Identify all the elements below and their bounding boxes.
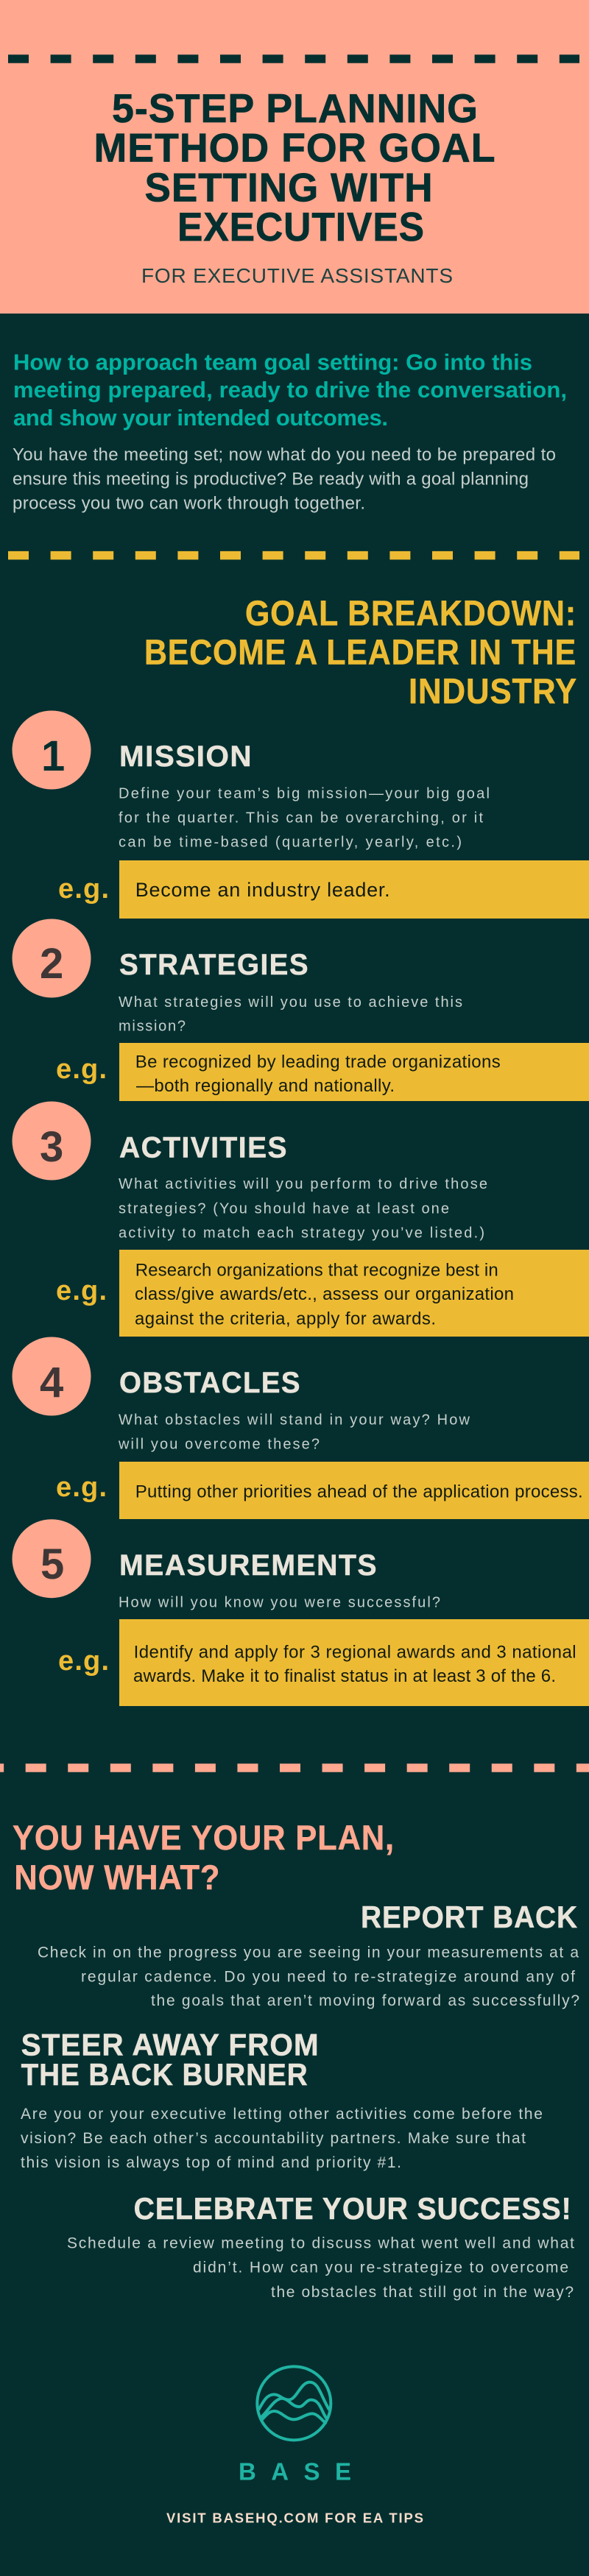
panel: step 3 activities — [12, 1101, 589, 1337]
section text: vision? Be each other’s accountability partners. Make sure that — [21, 2130, 526, 2147]
icon: number 2: 2 — [40, 940, 63, 988]
title — [94, 85, 496, 250]
icon: mountains in circle — [257, 2366, 331, 2440]
logo: base — [239, 2366, 351, 2485]
section text: Check in on the progress you are seeing in your measurements at a — [38, 1944, 579, 1961]
section text: the goals that aren’t moving forward as successfully? — [151, 1992, 579, 2009]
example box — [119, 1619, 589, 1706]
icon: number 5: 5 — [40, 1540, 64, 1588]
heading: you have your plan — [13, 1818, 395, 1897]
section: celebrate your success — [67, 2191, 574, 2301]
example box: against the criteria, apply for awards. — [135, 1309, 436, 1329]
lead text: and show your intended outcomes. — [13, 405, 388, 431]
title: EXECUTIVES — [177, 204, 425, 250]
example box: Become an industry leader. — [135, 879, 390, 901]
panel: step 1 mission — [12, 711, 589, 919]
heading: goal breakdown — [144, 595, 577, 712]
step heading: STRATEGIES — [119, 949, 309, 981]
lead text: How to approach team goal setting: Go into this — [13, 349, 532, 375]
example box — [119, 1043, 589, 1101]
step description: will you overcome these? — [118, 1436, 320, 1452]
section text: regular cadence. Do you need to re-strategize around any of — [81, 1968, 575, 1985]
step description — [119, 786, 490, 851]
example label: e.g. — [58, 874, 109, 905]
example box: Putting other priorities ahead of the application process. — [135, 1482, 583, 1502]
step heading: OBSTACLES — [119, 1367, 301, 1399]
icon: number 4: 4 — [40, 1359, 63, 1406]
section: steer away from the back burner — [21, 2027, 543, 2171]
footer link text: VISIT BASEHQ.COM FOR EA TIPS — [166, 2510, 423, 2526]
section heading — [21, 2027, 320, 2092]
example label: e.g. — [56, 1054, 107, 1085]
intro text — [13, 445, 556, 513]
example box: awards. Make it to finalist status in at least 3 of the 6. — [133, 1666, 556, 1686]
icon: number 1: 1 — [41, 732, 65, 780]
section text: didn’t. How can you re-strategize to overcome — [193, 2260, 568, 2276]
example box: Be recognized by leading trade organizations — [135, 1052, 501, 1072]
step description: activity to match each strategy you’ve listed.) — [119, 1225, 484, 1242]
example box: —both regionally and nationally. — [136, 1076, 395, 1096]
step description: What obstacles will stand in your way? How — [119, 1412, 470, 1429]
icon: number 4 — [12, 1337, 91, 1416]
section text — [38, 1944, 579, 2009]
step description — [119, 1176, 487, 1242]
section heading: REPORT BACK — [361, 1900, 578, 1934]
subtitle: FOR EXECUTIVE ASSISTANTS — [141, 264, 453, 287]
step description: What activities will you perform to drive those — [119, 1176, 487, 1192]
example label: e.g. — [56, 1275, 107, 1306]
intro text: ensure this meeting is productive? Be ready with a goal planning — [13, 470, 529, 489]
icon: number 3 — [12, 1101, 91, 1181]
heading: you have your plan: YOU HAVE YOUR PLAN, — [13, 1818, 395, 1857]
title: SETTING WITH — [144, 165, 433, 210]
icon: number 1 — [12, 711, 91, 789]
wordmark: BASE — [239, 2458, 351, 2485]
panel: header — [0, 0, 589, 314]
heading: you have your plan: NOW WHAT? — [14, 1858, 220, 1897]
example box: Research organizations that recognize best in — [135, 1261, 498, 1281]
example box: Identify and apply for 3 regional awards and 3 national — [134, 1643, 576, 1662]
title: 5-STEP PLANNING — [112, 85, 479, 131]
step description: How will you know you were successful? — [119, 1595, 440, 1611]
section heading: STEER AWAY FROM — [21, 2027, 320, 2062]
section text: this vision is always top of mind and priority #1. — [21, 2154, 401, 2171]
step heading: MISSION — [119, 740, 253, 773]
step description: strategies? (You should have at least one — [119, 1201, 449, 1217]
intro text: You have the meeting set; now what do you need to be prepared to — [13, 445, 556, 465]
section text — [67, 2234, 574, 2301]
panel: step 2 strategies — [12, 919, 589, 1101]
title: METHOD FOR GOAL — [94, 125, 496, 171]
step heading: ACTIVITIES — [119, 1132, 288, 1164]
example box: class/give awards/etc., assess our organization — [135, 1284, 514, 1304]
example label: e.g. — [56, 1472, 107, 1503]
lead text: meeting prepared, ready to drive the conversation, — [13, 377, 567, 403]
lead text — [13, 349, 567, 431]
example box — [119, 1250, 589, 1337]
step description — [119, 994, 462, 1035]
section text: Are you or your executive letting other activities come before the — [21, 2106, 543, 2123]
step description: Define your team’s big mission—your big goal — [119, 786, 490, 802]
icon: number 3: 3 — [40, 1123, 63, 1171]
example box — [119, 860, 589, 919]
section text: Schedule a review meeting to discuss what went well and what — [67, 2234, 574, 2252]
step heading: MEASUREMENTS — [119, 1549, 378, 1582]
step description: mission? — [119, 1019, 186, 1035]
section text — [21, 2106, 543, 2171]
panel: introduction — [13, 349, 567, 513]
icon: number 5 — [12, 1519, 91, 1598]
step description: for the quarter. This can be overarching, or it — [119, 810, 483, 826]
step description: What strategies will you use to achieve this — [119, 994, 462, 1011]
panel: step 4 obstacles — [12, 1337, 589, 1519]
example box — [119, 1462, 589, 1519]
heading: goal breakdown: INDUSTRY — [409, 673, 577, 712]
section: report back — [38, 1900, 579, 2009]
intro text: process you two can work through together. — [13, 493, 365, 513]
step description — [118, 1412, 470, 1452]
panel: step 5 measurements — [12, 1519, 589, 1706]
example label: e.g. — [58, 1646, 109, 1677]
step description: can be time-based (quarterly, yearly, etc.) — [119, 835, 462, 851]
section heading: THE BACK BURNER — [21, 2057, 308, 2092]
section text: the obstacles that still got in the way? — [271, 2284, 574, 2301]
icon: number 2 — [12, 919, 91, 998]
